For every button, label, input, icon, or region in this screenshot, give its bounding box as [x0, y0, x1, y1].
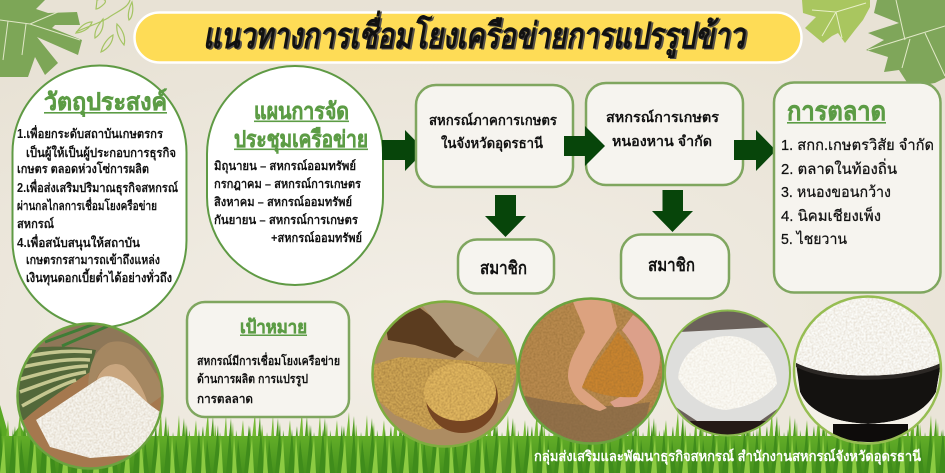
photo: rice in black bowl: [794, 296, 941, 444]
plan schedule: สิงหาคม – สหกรณ์ออมทรัพย์: [214, 195, 352, 209]
title banner: [134, 10, 802, 62]
objectives text: 2.เพื่อส่งเสริมปริมาณธุรกิจสหกรณ์: [17, 179, 178, 196]
marketing list: 2. ตลาดในท้องถิ่น: [781, 158, 897, 178]
Nong Han cooperative label: [606, 109, 719, 149]
plan schedule: [214, 159, 362, 245]
objectives text: ผ่านกลไกลการเชื่อมโยงครือข่าย: [17, 197, 157, 213]
plan schedule: +สหกรณ์ออมทรัพย์: [271, 231, 362, 245]
objectives text: 1.เพื่อยกระดับสถาบันเกษตรกร: [17, 125, 163, 141]
icon: monstera leaf top left: [0, 0, 82, 77]
objectives heading: วัตถุประสงค์: [44, 88, 167, 118]
panel: provincial agricultural cooperative: [416, 85, 573, 187]
photo: rice sack and ears: [15, 322, 164, 469]
provincial cooperative label: [429, 112, 557, 152]
plan schedule: กันยายน – สหกรณ์การเกษตร: [214, 213, 359, 227]
panel: member 2: [621, 234, 729, 298]
photo: hands holding paddy: [518, 298, 664, 444]
provincial cooperative label: สหกรณ์ภาคการเกษตร: [429, 112, 557, 128]
provincial cooperative label: ในจังหวัดอุดรธานี: [441, 134, 543, 152]
marketing heading: การตลาด: [787, 96, 886, 126]
plan heading: ประชุมเครือข่าย: [234, 126, 368, 154]
goal text: [197, 352, 340, 406]
marketing list: [781, 137, 934, 248]
plan heading: แผนการจัด: [254, 98, 349, 124]
member 2 label: สมาชิก: [648, 255, 695, 275]
objectives text: เป็นผู้ให้เป็นผู้ประกอบการธุรกิจ: [26, 145, 176, 161]
Nong Han cooperative label: สหกรณ์การเกษตร: [606, 109, 719, 125]
title shadow: แนวทางการเชื่อมโยงเครือข่ายการแปรรูปข้าว: [203, 11, 754, 60]
plan schedule: มิถุนายน – สหกรณ์ออมทรัพย์: [214, 159, 356, 174]
marketing list: 4. นิคมเชียงเพ็ง: [781, 206, 881, 225]
plan schedule: กรกฎาคม – สหกรณ์การเกษตร: [214, 177, 362, 191]
arrow: plan to provincial cooperative: [382, 130, 425, 171]
photo: rice on white plate: [665, 310, 791, 436]
arrow: provincial to Nong Han: [564, 126, 605, 166]
panel: meeting plan: [207, 66, 383, 285]
objectives text: เงินทุนดอกเบี้ยต่ำได้อย่างทั่วถึง: [26, 268, 172, 286]
objectives text: 4.เพื่อสนับสนุนให้สถาบัน: [17, 234, 140, 251]
title: แนวทางการเชื่อมโยงเครือข่ายการแปรรูปข้าว: [201, 10, 752, 59]
panel: member 1: [458, 240, 554, 294]
icon: light monstera leaf top right: [802, 0, 870, 43]
goal heading: เป้าหมาย: [240, 317, 307, 337]
panel: Nong Han cooperative: [586, 83, 743, 185]
arrow: down to member 1: [485, 195, 526, 237]
Nong Han cooperative label: หนองหาน จำกัด: [612, 133, 712, 149]
arrow: down to member 2: [652, 190, 693, 232]
footer credit: กลุ่มส่งเสริมและพัฒนาธุรกิจสหกรณ์ สำนักงานสหกรณ์จังหวัดอุดรธานี: [534, 448, 921, 465]
goal text: การตลลาด: [197, 392, 253, 406]
arrow: Nong Han to marketing: [734, 130, 776, 171]
objectives text: เกษตรกรสามารถเข้าถึงแหล่ง: [26, 253, 160, 267]
icon: dark monstera leaf top right: [866, 0, 945, 87]
panel: objectives: [12, 66, 186, 328]
objectives text: เกษตร ตลอดห่วงโซ่การผลิต: [17, 161, 149, 176]
grass: [0, 405, 945, 473]
goal text: สหกรณ์มีการเชื่อมโยงเครือข่าย: [197, 352, 340, 368]
marketing list: 1. สกก.เกษตรวิสัย จำกัด: [781, 137, 934, 154]
goal text: ด้านการผลิต การแปรรูป: [197, 372, 308, 387]
marketing list: 3. หนองขอนกว้าง: [781, 184, 891, 201]
objectives text: [17, 125, 178, 286]
member 1 label: สมาชิก: [480, 258, 527, 278]
objectives text: สหกรณ์: [17, 216, 54, 231]
marketing list: 5. ไชยวาน: [781, 230, 847, 248]
panel: marketing: [774, 82, 940, 292]
plan heading: [234, 98, 368, 154]
photo: paddy rice in bowl: [372, 300, 518, 447]
icon: vine top left: [76, 0, 133, 52]
panel: goal: [187, 302, 349, 417]
